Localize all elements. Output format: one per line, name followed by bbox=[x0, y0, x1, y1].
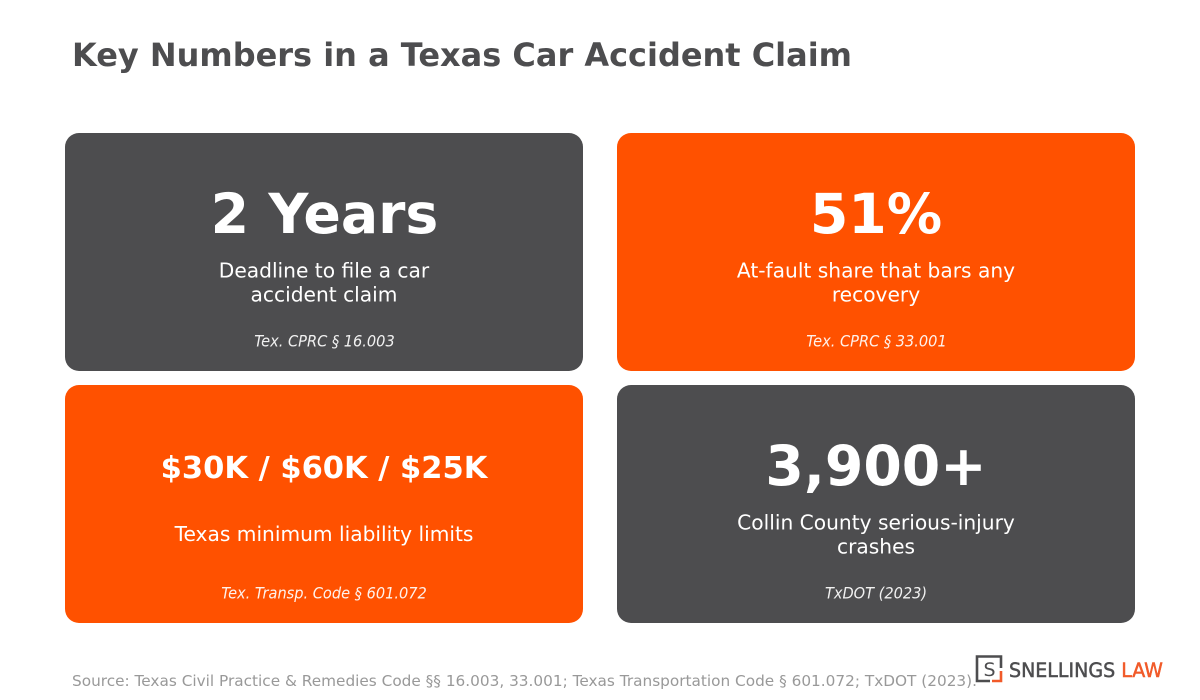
citation: TxDOT: TxDOT (2023) bbox=[825, 584, 927, 602]
citation: Transp. Code: Tex. Transp. Code § 601.072 bbox=[221, 584, 427, 602]
description: at-fault share: At-fault share that bars any bbox=[737, 258, 1015, 282]
citation: CPRC 33.001: Tex. CPRC § 33.001 bbox=[806, 332, 947, 350]
panel: Collin County crashes bbox=[617, 385, 1135, 623]
stat: 3,900+: 3,900+ bbox=[765, 435, 987, 499]
description: deadline: accident claim bbox=[251, 282, 397, 306]
icon: S bracket mark: S bbox=[983, 659, 996, 681]
stat: 2 Years: 2 Years bbox=[211, 183, 438, 247]
description: serious-injury crashes: Collin County serious-injury bbox=[737, 510, 1015, 534]
description: deadline: Deadline to file a car bbox=[219, 258, 429, 282]
stat: liability amounts: $30K / $60K / $25K bbox=[161, 451, 489, 486]
description: at-fault share: recovery bbox=[832, 282, 920, 306]
panel: 2 years deadline bbox=[65, 133, 583, 371]
description: serious-injury crashes: crashes bbox=[837, 534, 915, 558]
panel: liability limits bbox=[65, 385, 583, 623]
title: Key Numbers in a Texas Car Accident Claim bbox=[72, 36, 852, 74]
citation: CPRC 16.003: Tex. CPRC § 16.003 bbox=[254, 332, 395, 350]
source note: Source: Texas Civil Practice & Remedies Code §§ 16.003, 33.001; Texas Transportation Code § 601.072; TxDOT (2023). bbox=[72, 672, 977, 690]
stat: 51%: 51% bbox=[810, 183, 942, 247]
icon: S bracket mark bbox=[977, 656, 1001, 681]
description: minimum limits: Texas minimum liability limits bbox=[174, 522, 473, 546]
logo: Snellings Law bbox=[977, 656, 1163, 682]
logo wordmark: SNELLINGS LAW bbox=[1009, 659, 1163, 682]
panel: 51 percent bar bbox=[617, 133, 1135, 371]
